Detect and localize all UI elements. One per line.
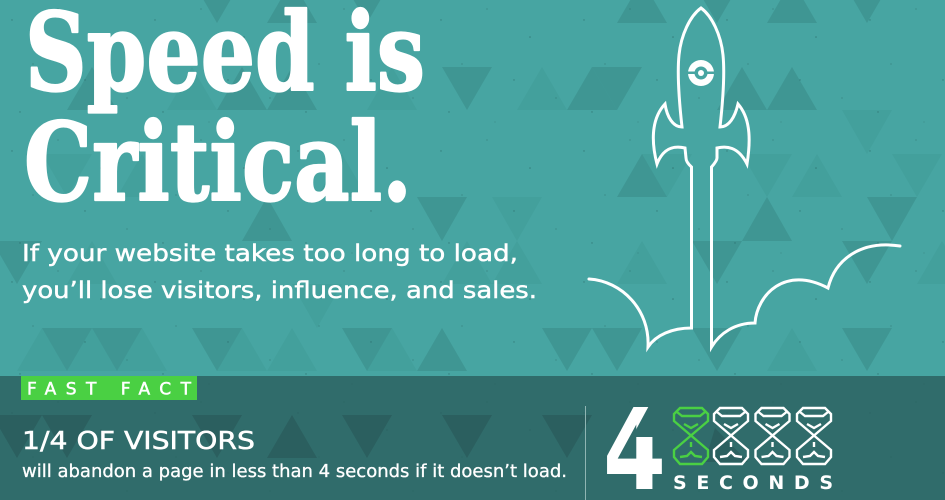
- icon: hourglass white 2: [714, 408, 748, 464]
- bottom band: [0, 376, 945, 500]
- title: Critical.: [24, 100, 412, 226]
- icon: hourglass green: [674, 408, 708, 464]
- seconds label: SECONDS: [673, 472, 833, 494]
- subtitle text: you’ll lose visitors, influence, and sales.: [22, 276, 537, 304]
- icon: rocket porthole: [687, 60, 715, 86]
- icon: rocket launching through clouds: [589, 8, 900, 347]
- subtitle text: [22, 239, 537, 304]
- subtitle text: If your website takes too long to load,: [22, 239, 518, 267]
- title: [24, 0, 425, 226]
- fast fact label: FAST FACT: [27, 380, 192, 400]
- divider: [585, 406, 586, 500]
- fast fact headline: 1/4 OF VISITORS: [22, 426, 255, 455]
- background: teal triangle pattern: [0, 0, 945, 376]
- fast fact body: will abandon a page in less than 4 seconds if it doesn’t load.: [22, 461, 567, 482]
- icon: hourglass white 3: [756, 408, 790, 464]
- icon: hourglass white 4: [797, 408, 831, 464]
